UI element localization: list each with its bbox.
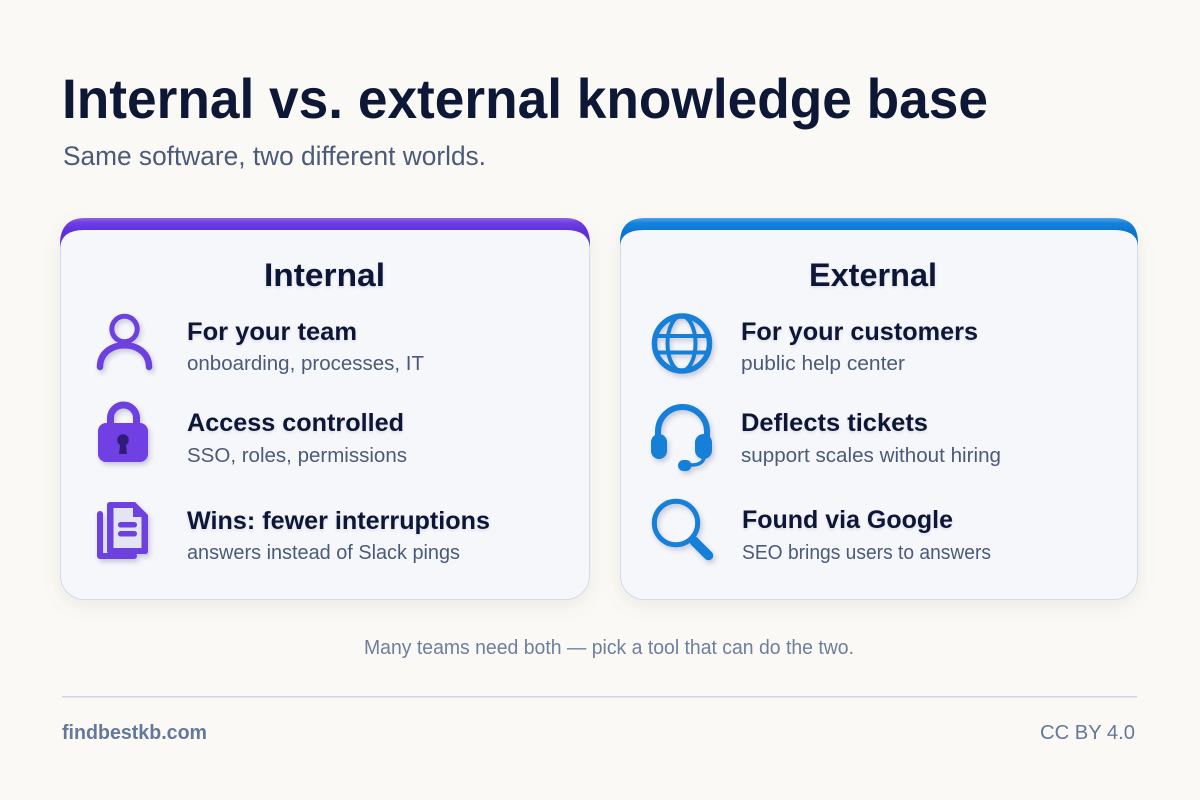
- panel heading: external: External: [809, 257, 937, 293]
- item heading: access controlled: Access controlled: [187, 409, 404, 437]
- card top accent: [620, 218, 1138, 245]
- icon: globe: [654, 316, 710, 371]
- card body: [60, 219, 590, 600]
- item heading: for your team: For your team: [187, 318, 357, 346]
- panel: internal: [60, 218, 590, 600]
- item text: onboarding: onboarding, processes, IT: [187, 353, 424, 375]
- icon: magnifying glass: [654, 501, 708, 556]
- panel heading: internal: Internal: [264, 257, 385, 293]
- footer rule: [62, 696, 1137, 698]
- icon: person: [100, 316, 149, 367]
- item heading: for your customers: For your customers: [741, 318, 978, 346]
- item heading: deflects tickets: Deflects tickets: [741, 409, 928, 437]
- item text: answers: answers instead of Slack pings: [187, 542, 460, 564]
- item heading: found via google: Found via Google: [742, 506, 953, 534]
- footer: source: findbestkb.com: [62, 722, 207, 744]
- item text: support scales: support scales without hiring: [741, 445, 1001, 467]
- icon: headset: [651, 407, 712, 471]
- card top accent: [60, 218, 590, 247]
- title: Internal vs. external knowledge base: [62, 67, 988, 130]
- item text: seo: SEO brings users to answers: [742, 542, 991, 564]
- footer: license: CC BY 4.0: [1040, 722, 1135, 744]
- subtitle: Same software, two different worlds.: [63, 141, 486, 171]
- item text: sso: SSO, roles, permissions: [187, 445, 407, 467]
- card body: [620, 219, 1138, 600]
- icon: documents: [100, 502, 148, 556]
- callout: Many teams need both — pick a tool that can do the two.: [364, 637, 854, 659]
- panel: external: [620, 218, 1138, 600]
- item heading: wins: Wins: fewer interruptions: [187, 507, 490, 535]
- item text: public help center: public help center: [741, 353, 905, 375]
- icon: padlock: [98, 405, 148, 462]
